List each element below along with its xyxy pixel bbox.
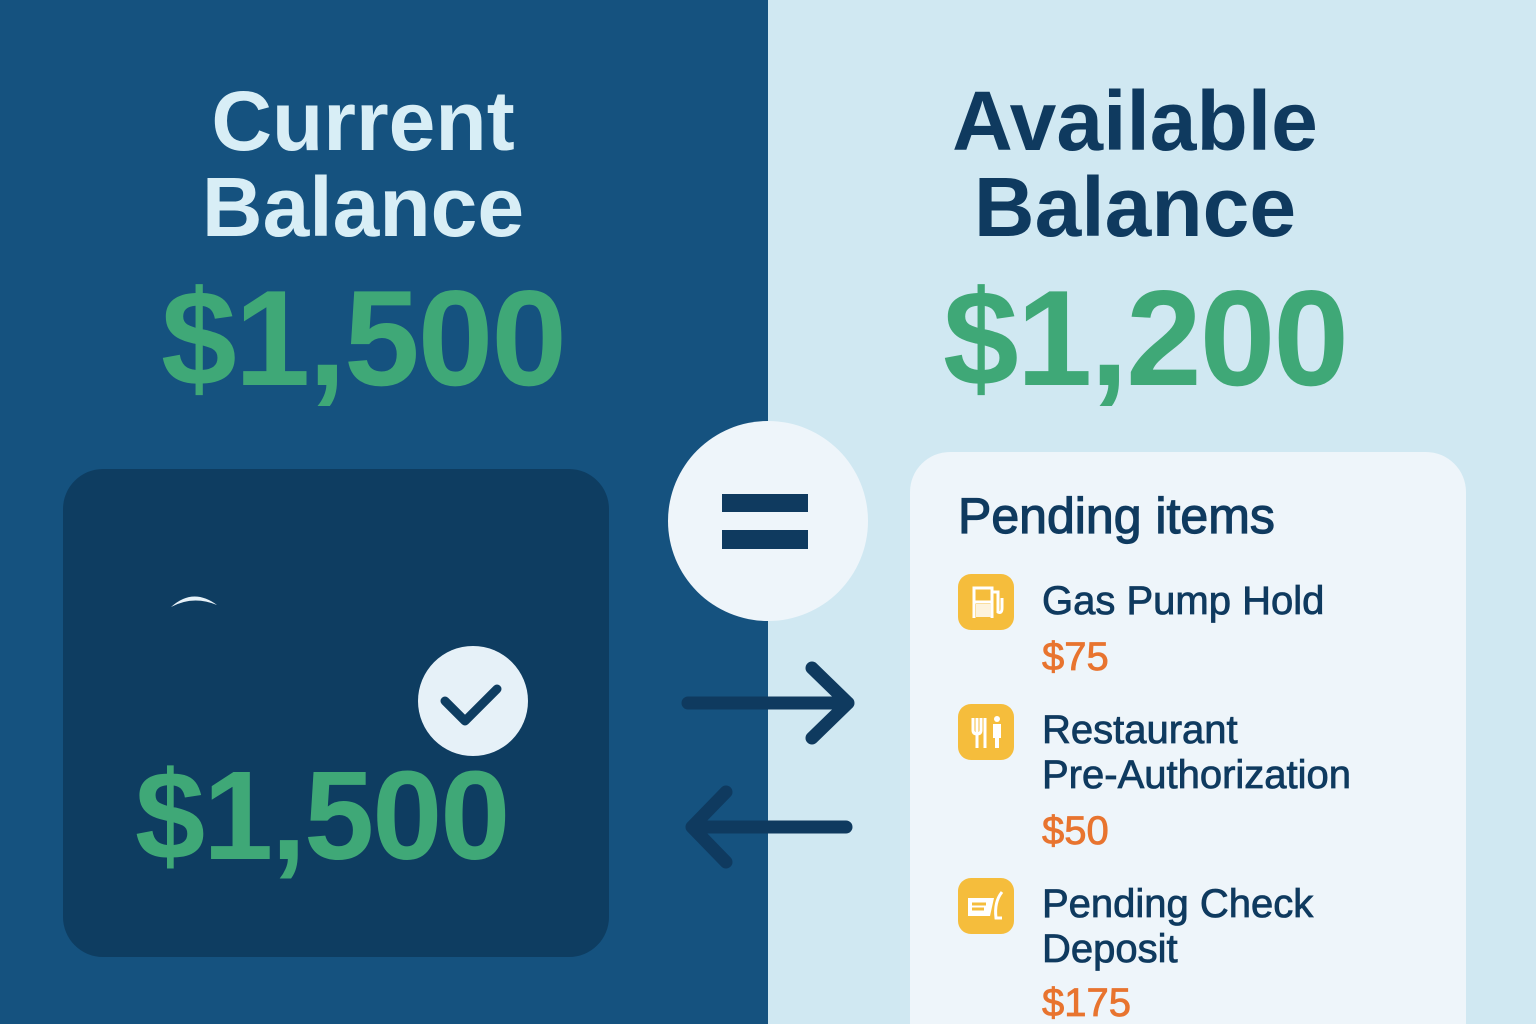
amount: current balance: $1,500 bbox=[161, 262, 565, 414]
amount: card balance: $1,500 bbox=[135, 745, 508, 886]
title: available balance bbox=[952, 74, 1318, 254]
item: gas pump hold: Gas Pump Hold bbox=[1042, 579, 1324, 623]
panel: right background bbox=[768, 0, 1536, 1024]
item: pending check deposit: Pending Check bbox=[1042, 882, 1313, 926]
item: restaurant pre-authorization: $50 bbox=[1042, 809, 1109, 853]
title: available balance: Balance bbox=[974, 160, 1296, 254]
icon: check circle bbox=[418, 646, 528, 756]
amount: available balance: $1,200 bbox=[943, 262, 1347, 414]
icon: check bbox=[958, 878, 1014, 934]
panel: left background bbox=[0, 0, 768, 1024]
title: current balance bbox=[202, 74, 524, 254]
item: pending check deposit: Deposit bbox=[1042, 927, 1178, 971]
panel: current balance card bbox=[63, 469, 609, 957]
icon: equals circle bbox=[668, 421, 868, 621]
item: restaurant pre-authorization: Pre-Authorization bbox=[1042, 753, 1351, 797]
arrow: left bbox=[686, 786, 852, 868]
title: current balance: Balance bbox=[202, 160, 524, 254]
title: current balance: Current bbox=[211, 74, 515, 168]
panel: pending items bbox=[910, 452, 1466, 1024]
item: restaurant pre-authorization bbox=[958, 704, 1351, 853]
heading: pending items: Pending items bbox=[958, 488, 1275, 544]
item: gas pump hold bbox=[958, 574, 1324, 679]
icon: restaurant bbox=[958, 704, 1014, 760]
icon: arc mark bbox=[171, 596, 217, 607]
arrow: right bbox=[682, 662, 854, 744]
item: restaurant pre-authorization: Restaurant bbox=[1042, 708, 1238, 752]
icon: gas pump bbox=[958, 574, 1014, 630]
title: available balance: Available bbox=[952, 74, 1318, 168]
item: pending check deposit: $175 bbox=[1042, 981, 1131, 1024]
item: gas pump hold: $75 bbox=[1042, 635, 1109, 679]
item: pending check deposit bbox=[958, 878, 1314, 1024]
